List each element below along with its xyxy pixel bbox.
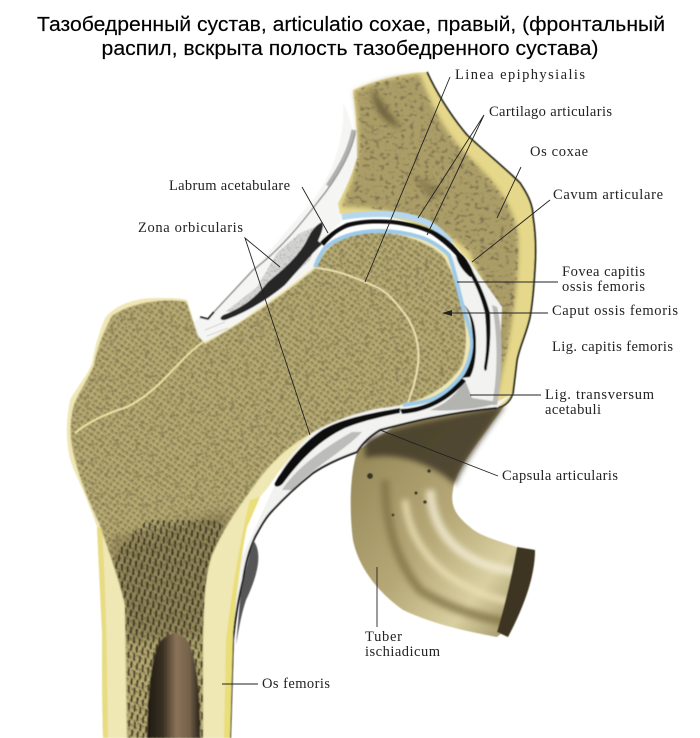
anatomical labels: ischiadicum (365, 644, 441, 660)
anatomical labels: Os femoris (262, 676, 330, 692)
cavum articulare (221, 219, 490, 487)
title: Тазобедренный сустав, articulatio coxae, правый, (фронтальный (37, 13, 665, 36)
anatomical labels: Fovea capitis (562, 264, 645, 280)
leader lines (222, 77, 558, 684)
epiphyseal lines (75, 342, 203, 433)
anatomical labels: Cavum articulare (553, 187, 663, 203)
title (37, 13, 665, 60)
anatomical labels: ossis femoris (562, 279, 645, 295)
anatomical labels: Capsula articularis (502, 468, 618, 484)
marrow cavity (147, 634, 200, 738)
cartilago articularis (315, 214, 472, 405)
anatomical labels (138, 67, 678, 692)
anatomical labels: Zona orbicularis (138, 220, 243, 236)
illustration: hip joint section (60, 72, 536, 738)
anatomical labels: Os coxae (530, 144, 588, 160)
zona orbicularis stipple (220, 220, 498, 490)
anatomical labels: Linea epiphysialis (455, 67, 585, 83)
ischium bone (351, 405, 535, 637)
os coxae bone (335, 72, 536, 412)
femur (60, 225, 480, 738)
capsule tissue upper (190, 103, 357, 344)
joint capsule tissue lower (222, 255, 513, 738)
anatomical labels: Lig. capitis femoris (552, 339, 673, 355)
anatomical labels: Tuber (365, 629, 402, 645)
title: распил, вскрыта полость тазобедренного сустава) (102, 37, 598, 60)
anatomical labels: Caput ossis femoris (552, 303, 678, 319)
anatomical labels: Labrum acetabulare (169, 178, 290, 194)
anatomical labels: Lig. transversum (545, 387, 655, 403)
anatomical labels: Cartilago articularis (489, 104, 612, 120)
anatomical labels: acetabuli (545, 402, 601, 418)
